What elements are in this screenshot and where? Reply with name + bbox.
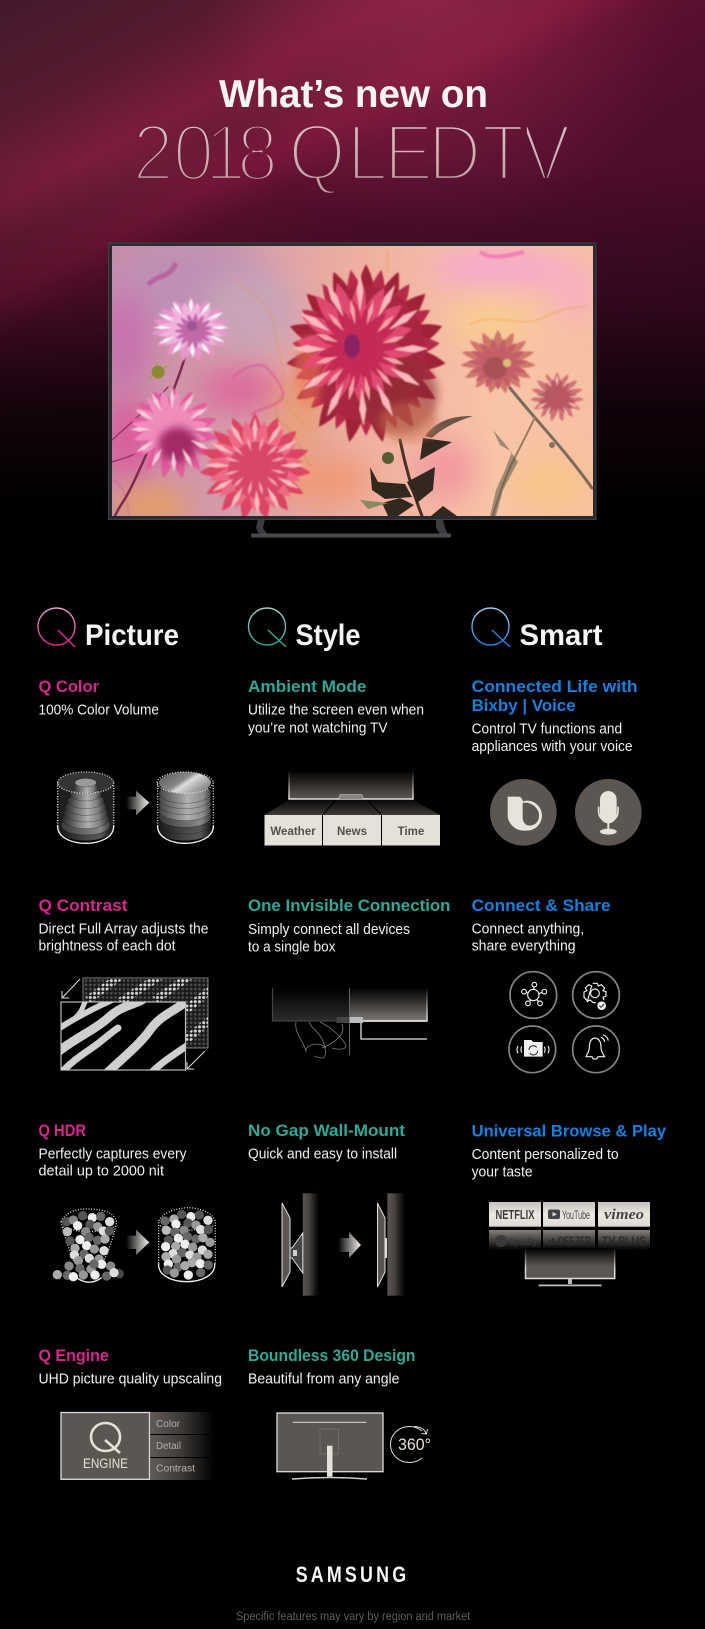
bottom row tiles: DEEZER bbox=[558, 1234, 591, 1248]
illustration: ambient TV with cards bbox=[264, 770, 440, 846]
illustration: ambient TV with cards: Weather bbox=[270, 826, 316, 838]
panel: Connected Life with Bixby Voice bbox=[472, 678, 642, 846]
description: to a single box bbox=[248, 940, 336, 956]
heading: Q Engine bbox=[38, 1347, 109, 1365]
panel: Boundless 360 Design bbox=[248, 1347, 431, 1479]
TV side with bracket bbox=[282, 1203, 303, 1287]
description bbox=[472, 1147, 619, 1181]
bottom row tiles bbox=[489, 1230, 650, 1250]
arrows bbox=[62, 979, 205, 1069]
description: detail up to 2000 nit bbox=[38, 1164, 164, 1180]
panel: Q Smart heading bbox=[472, 608, 602, 652]
arrow bbox=[126, 1230, 149, 1255]
heading bbox=[472, 678, 638, 715]
logo: SAMSUNG: SAMSUNG bbox=[296, 1562, 409, 1587]
panel: One Invisible Connection bbox=[248, 897, 450, 1058]
panel: Q Contrast bbox=[38, 897, 210, 1072]
arrow bbox=[338, 1232, 361, 1258]
icon: Bixby bbox=[490, 779, 557, 846]
arrow bbox=[126, 791, 149, 815]
TV bbox=[526, 1248, 615, 1286]
panel: Q Picture heading bbox=[38, 608, 179, 652]
Q logo bbox=[91, 1423, 120, 1453]
footnote: Specific features may vary by region and market bbox=[236, 1611, 471, 1623]
heading: No Gap Wall-Mount bbox=[248, 1122, 406, 1140]
dot array layer bbox=[83, 976, 210, 1048]
header gradient background bbox=[0, 0, 705, 540]
illustration: zebra with dot array bbox=[58, 976, 210, 1072]
flower: upper left pale bbox=[150, 297, 232, 362]
stems and leaves bbox=[112, 357, 592, 516]
TV screen picture bbox=[100, 240, 599, 523]
heading: Picture: Picture bbox=[85, 619, 179, 652]
description: UHD picture quality upscaling bbox=[38, 1371, 222, 1387]
title: 2018 QLED TV bbox=[133, 108, 570, 198]
heading: Connected Life with bbox=[472, 678, 638, 696]
flower: lower left bbox=[129, 387, 217, 478]
panel: No Gap Wall-Mount bbox=[248, 1122, 406, 1296]
panel: Universal Browse & Play bbox=[472, 1123, 667, 1286]
heading: Connect & Share bbox=[472, 897, 611, 915]
heading: One Invisible Connection bbox=[248, 897, 450, 915]
icon: folder sync bbox=[509, 1026, 556, 1073]
description: brightness of each dot bbox=[38, 939, 176, 955]
panel: Q Style heading bbox=[248, 608, 360, 652]
feature rows: Color bbox=[156, 1419, 181, 1430]
illustration: TV cables bbox=[272, 988, 428, 1058]
icons: connect and share bbox=[509, 972, 619, 1073]
description bbox=[472, 921, 584, 955]
heading: Q Contrast bbox=[38, 897, 128, 915]
description bbox=[472, 721, 633, 755]
bud bbox=[148, 361, 169, 380]
description: Connect anything, bbox=[472, 921, 584, 937]
description: Perfectly captures every bbox=[38, 1146, 187, 1162]
feature rows bbox=[150, 1412, 214, 1480]
left dots bbox=[53, 1209, 124, 1282]
flower: bottom pink bbox=[198, 411, 312, 521]
description: Control TV functions and bbox=[472, 721, 622, 737]
bottom row tiles: Spotify bbox=[509, 1236, 537, 1248]
illustration: wall mount gap comparison bbox=[282, 1193, 405, 1296]
heading: Boundless 360 Design bbox=[248, 1347, 416, 1365]
description bbox=[38, 921, 208, 955]
heading: Universal Browse & Play bbox=[472, 1123, 667, 1141]
panel: Ambient Mode bbox=[248, 678, 440, 846]
description bbox=[248, 922, 410, 956]
icon: bell bbox=[573, 1026, 619, 1073]
TV bezel bbox=[108, 243, 596, 520]
description: share everything bbox=[472, 939, 576, 955]
panel: Connect & Share bbox=[472, 897, 619, 1073]
description: Beautiful from any angle bbox=[248, 1371, 400, 1387]
description bbox=[248, 702, 424, 737]
icon: Q outline teal bbox=[248, 608, 286, 647]
right dots bbox=[159, 1208, 215, 1282]
illustration: Q Engine box: ENGINE bbox=[83, 1455, 128, 1471]
description: Content personalized to bbox=[472, 1147, 619, 1163]
top row tiles bbox=[489, 1202, 650, 1227]
heading: Bixby | Voice bbox=[472, 697, 576, 715]
feature rows: Detail bbox=[156, 1441, 181, 1452]
description bbox=[38, 1146, 187, 1180]
bottom row tiles: TV PLUS bbox=[602, 1236, 646, 1248]
icon: gear bbox=[573, 972, 619, 1018]
description: your taste bbox=[472, 1165, 533, 1181]
wall right bbox=[387, 1193, 405, 1296]
description: appliances with your voice bbox=[472, 739, 633, 755]
illustration: content tiles and TV bbox=[489, 1202, 650, 1286]
heading: Q HDR bbox=[38, 1122, 86, 1140]
right cylinder bbox=[157, 772, 213, 843]
illustration: Q Engine box bbox=[61, 1412, 214, 1480]
TV with flower image bbox=[100, 240, 599, 538]
wall left bbox=[303, 1193, 319, 1296]
flower: right upper bbox=[460, 330, 536, 395]
illustration: ambient TV with cards: Time bbox=[398, 826, 424, 838]
swirls bbox=[113, 250, 587, 516]
icon: 360 rotation bbox=[390, 1426, 431, 1462]
icon: hub bbox=[510, 972, 557, 1018]
top row tiles: NETFLIX bbox=[496, 1207, 535, 1222]
heading: Q Color bbox=[38, 678, 100, 696]
panel: Q Engine bbox=[38, 1347, 222, 1480]
heading: Style: Style bbox=[296, 619, 360, 652]
illustration: HDR dots bbox=[53, 1208, 215, 1282]
panel: Q HDR bbox=[38, 1122, 215, 1282]
icon: microphone bbox=[575, 779, 642, 846]
flower: right lower bbox=[530, 372, 584, 422]
left cylinder bbox=[58, 772, 114, 843]
top row tiles: YouTube bbox=[562, 1208, 590, 1222]
description: Simply connect all devices bbox=[248, 922, 410, 938]
top row tiles: vimeo bbox=[604, 1207, 644, 1223]
description: you’re not watching TV bbox=[248, 721, 388, 737]
icon: Q outline pink bbox=[38, 608, 75, 647]
TV side flush bbox=[378, 1203, 387, 1287]
heading: Smart: Smart bbox=[520, 619, 602, 652]
title: What’s new on bbox=[219, 73, 488, 116]
icon: Q outline blue bbox=[472, 608, 510, 647]
description: Utilize the screen even when bbox=[248, 702, 424, 718]
description: Quick and easy to install bbox=[248, 1146, 397, 1162]
zebra image bbox=[58, 1000, 188, 1072]
panel: Q Color bbox=[38, 678, 213, 843]
heading: Ambient Mode bbox=[248, 678, 366, 696]
illustration: TV back bbox=[277, 1413, 383, 1479]
flower: big centre dahlia bbox=[286, 264, 446, 446]
feature rows: Contrast bbox=[156, 1464, 195, 1474]
illustration: color volume cylinders bbox=[58, 772, 213, 843]
description: 100% Color Volume bbox=[38, 702, 159, 718]
illustration: ambient TV with cards: News bbox=[337, 826, 367, 838]
icon: 360 rotation: 360° bbox=[398, 1435, 431, 1454]
description: Direct Full Array adjusts the bbox=[38, 921, 208, 937]
TV stand bbox=[251, 519, 451, 538]
